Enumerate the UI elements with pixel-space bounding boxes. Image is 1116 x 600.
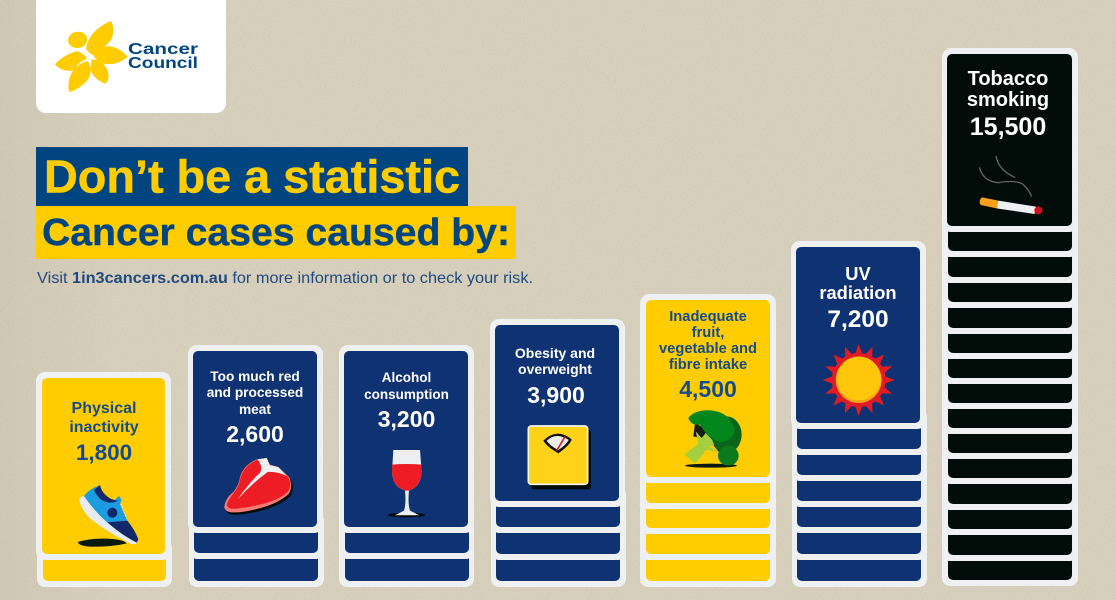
label: and processed — [207, 385, 303, 400]
card stack: red and processed meat — [188, 345, 324, 587]
icon: broccoli — [684, 410, 742, 468]
label: vegetable and — [659, 341, 757, 357]
card stack: UV radiation — [791, 241, 927, 587]
label: fibre intake — [669, 357, 747, 373]
main card — [339, 345, 474, 533]
label: overweight — [518, 361, 592, 377]
label: UV — [845, 263, 871, 284]
main card — [942, 48, 1078, 232]
card stack: alcohol consumption — [339, 345, 474, 587]
icon: sun — [823, 344, 895, 416]
label — [515, 345, 595, 377]
number: 7,200 — [827, 306, 889, 333]
icon: bathroom scale — [528, 426, 591, 489]
number: 15,500 — [970, 113, 1046, 141]
icon: running shoe — [78, 485, 138, 547]
label — [207, 369, 303, 417]
main card — [490, 319, 625, 507]
icon: steak — [224, 458, 293, 515]
text block: website call to action: Visit 1in3cancers.com.au for more information or to check your risk. — [37, 270, 533, 287]
label: smoking — [967, 89, 1049, 111]
label — [659, 309, 757, 373]
title: Don't be a statistic: Don’t be a statistic — [44, 150, 460, 202]
number: 1,800 — [76, 440, 132, 465]
label: consumption — [364, 387, 449, 402]
label — [364, 370, 449, 402]
card stack: physical inactivity — [36, 372, 172, 587]
label — [69, 400, 139, 436]
logo wordmark — [128, 41, 198, 72]
card stack: tobacco smoking — [942, 48, 1078, 586]
main card — [188, 345, 323, 533]
label: Inadequate — [669, 309, 747, 325]
icon: wine glass — [388, 450, 425, 517]
logo wordmark: Council — [128, 55, 198, 72]
subtitle: Cancer cases caused by: Cancer cases caused by: — [42, 212, 510, 254]
label: radiation — [819, 282, 897, 303]
label: Tobacco — [968, 68, 1048, 90]
number: 4,500 — [679, 376, 737, 402]
icon: cigarette with smoke — [979, 156, 1042, 214]
label — [967, 68, 1049, 111]
main card — [36, 372, 171, 560]
label: Too much red — [210, 369, 300, 384]
number: 2,600 — [226, 421, 284, 447]
logo wordmark: Cancer — [128, 41, 198, 58]
main card — [640, 294, 776, 483]
label: Obesity and — [515, 345, 595, 361]
number: 3,200 — [378, 406, 435, 432]
label: fruit, — [692, 325, 724, 341]
main card — [791, 241, 926, 429]
label — [819, 263, 897, 303]
label: Alcohol — [382, 370, 431, 385]
card stack: fruit, vegetable and fibre intake — [640, 294, 776, 587]
icon: yellow daffodil flower — [56, 22, 126, 91]
card stack: obesity and overweight — [490, 319, 626, 587]
logo panel: Cancer Council — [36, 0, 226, 113]
label: Physical — [72, 400, 136, 417]
label: meat — [239, 402, 271, 417]
label: inactivity — [69, 419, 139, 436]
number: 3,900 — [527, 382, 585, 408]
